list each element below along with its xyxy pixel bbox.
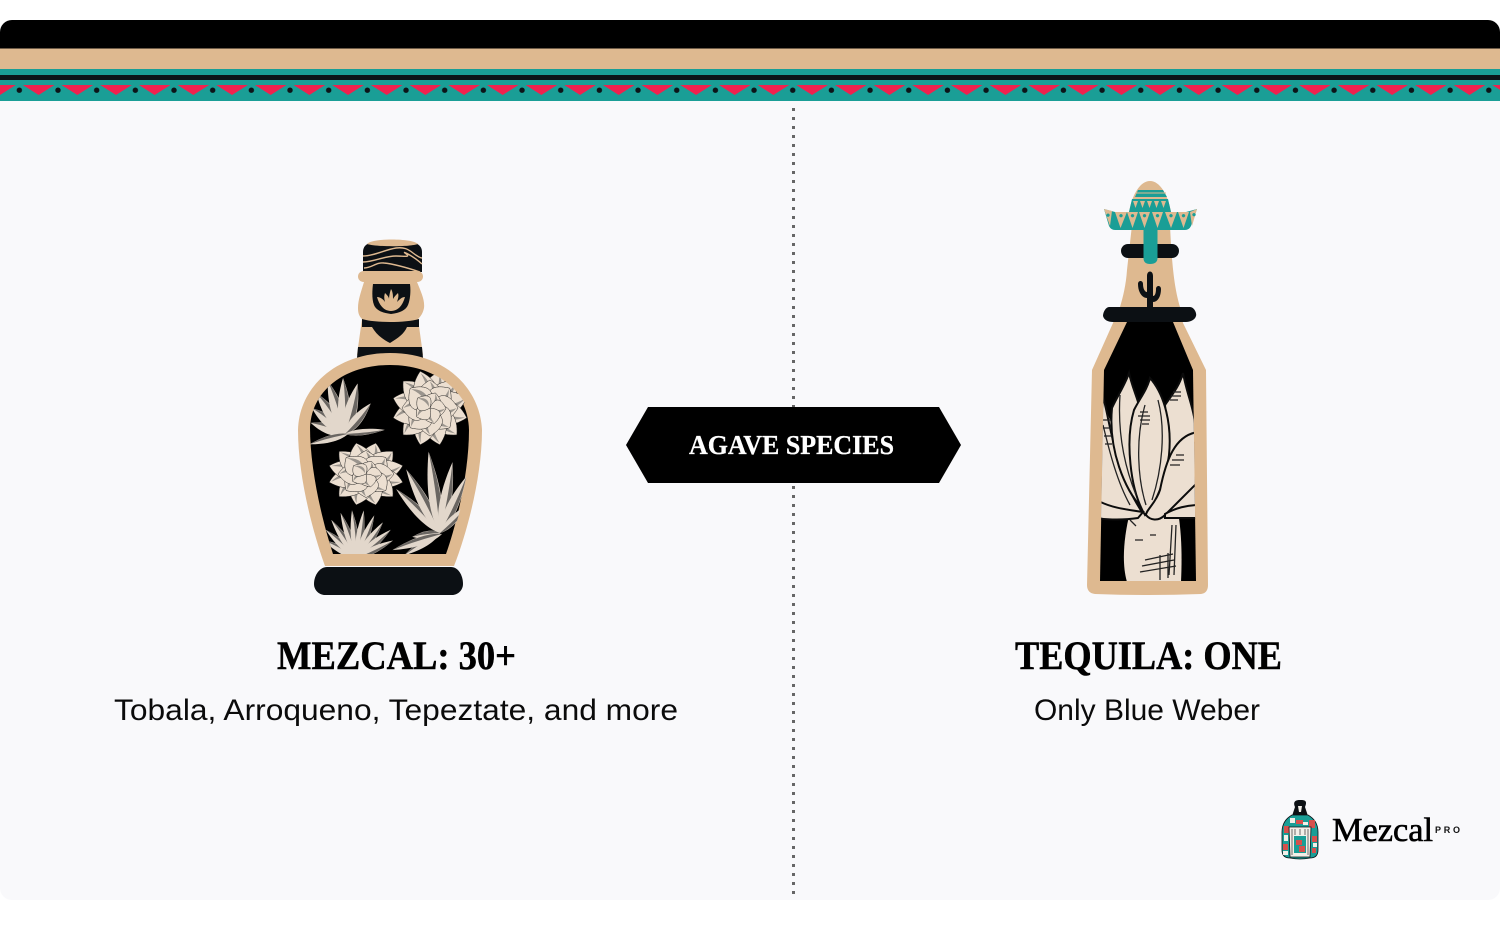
decorative patterned banner (0, 20, 1500, 101)
heading: tequila: TEQUILA: ONE (1015, 633, 1282, 678)
illustration: tequila bottle (1087, 181, 1208, 595)
bottle body (298, 353, 482, 566)
text: tequila species: Only Blue Weber (1034, 694, 1260, 727)
agave: top left (308, 378, 385, 448)
cactus icon (1138, 272, 1161, 308)
badge: agave species (626, 407, 961, 483)
bottle silhouette (1087, 225, 1208, 595)
text: mezcal species: Tobala, Arroqueno, Tepeztate, and more (114, 694, 678, 727)
logo pro mark: PRO (1435, 825, 1460, 835)
shoulder collar (1103, 307, 1196, 322)
agave: bottom left (326, 510, 393, 554)
agave: top right rosette (393, 371, 467, 445)
heading: mezcal: MEZCAL: 30+ (277, 633, 516, 678)
bottle neck with shield (357, 271, 424, 358)
agave leaf mass (1101, 406, 1196, 518)
badge: agave species: AGAVE SPECIES (689, 430, 894, 460)
agave: middle rosette (329, 443, 403, 505)
sombrero hat (1104, 181, 1197, 264)
bottle label window (310, 365, 469, 554)
agave trunk (1124, 512, 1182, 582)
logo: Mezcal Pro (1282, 800, 1460, 859)
logo bottle icon (1282, 800, 1318, 859)
agave leaf shading (1103, 392, 1184, 580)
agave leaves (1094, 373, 1198, 520)
illustration: mezcal bottle (298, 240, 482, 595)
upper collar (1121, 244, 1179, 258)
bottle window (1100, 322, 1196, 581)
agave: lower right (392, 452, 466, 554)
logo wordmark: Mezcal (1332, 812, 1433, 849)
agave illustrations (308, 368, 471, 561)
centre dotted divider (792, 108, 795, 895)
bottle base (314, 567, 463, 595)
bottle cap (363, 240, 422, 272)
agave plant (1094, 373, 1200, 582)
